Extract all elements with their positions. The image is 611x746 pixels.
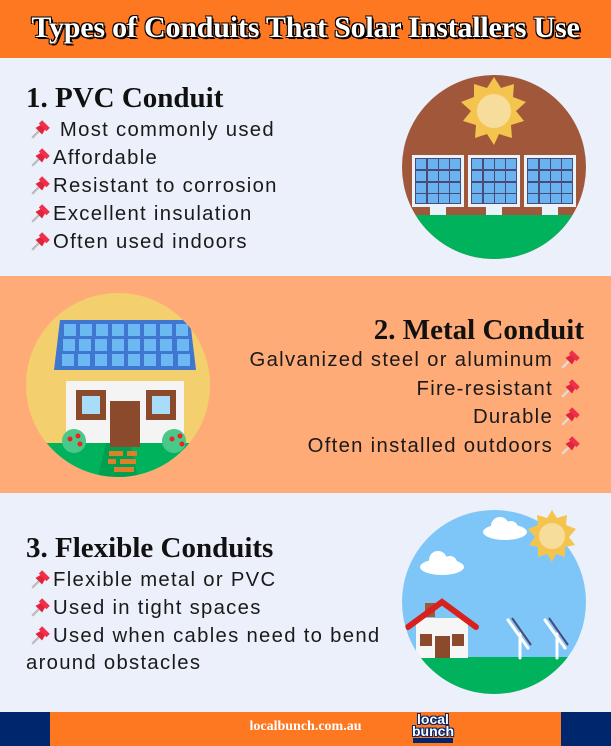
- bullets: metal: Durable: [473, 406, 553, 428]
- icon: house circle: [26, 293, 210, 477]
- bullets: flexible: Flexible metal or PVC: [53, 569, 276, 591]
- logo: bunch: [412, 723, 454, 739]
- heading: flexible: 3. Flexible Conduits: [26, 532, 273, 564]
- bullets: PVC: Resistant to corrosion: [53, 175, 278, 197]
- bullets: PVC: Excellent insulation: [53, 203, 253, 225]
- bullets: metal: Fire-resistant: [417, 378, 553, 400]
- icon: house with solar panels circle: [402, 510, 586, 694]
- panel: PVC conduit: [28, 75, 586, 259]
- bullets: PVC: Often used indoors: [53, 231, 248, 253]
- title: Types of Conduits That Solar Installers Use: [31, 11, 580, 44]
- bullets: PVC: Affordable: [53, 147, 158, 169]
- bullets: PVC: [32, 119, 278, 253]
- heading: metal: 2. Metal Conduit: [374, 314, 584, 346]
- logo: [412, 711, 454, 743]
- panel: flexible conduits: [26, 510, 586, 694]
- bullets: flexible: Used in tight spaces: [53, 597, 262, 619]
- bullets: metal: [250, 349, 580, 456]
- bullets: flexible: Used when cables need to bend: [53, 625, 380, 647]
- icon: solar panels circle: [402, 75, 586, 259]
- heading: PVC: 1. PVC Conduit: [26, 82, 223, 114]
- footer: [0, 712, 611, 746]
- bullets: metal: Often installed outdoors: [308, 434, 553, 456]
- header bar: [0, 0, 611, 58]
- bullets: flexible: [26, 569, 380, 674]
- bullets: PVC: Most commonly used: [60, 119, 275, 141]
- panel: metal conduit: [0, 276, 611, 493]
- logo: local: [417, 711, 449, 727]
- footer url: localbunch.com.au: [249, 719, 362, 734]
- bullets: metal: Galvanized steel or aluminum: [250, 349, 553, 371]
- bullets: flexible: around obstacles: [26, 652, 201, 674]
